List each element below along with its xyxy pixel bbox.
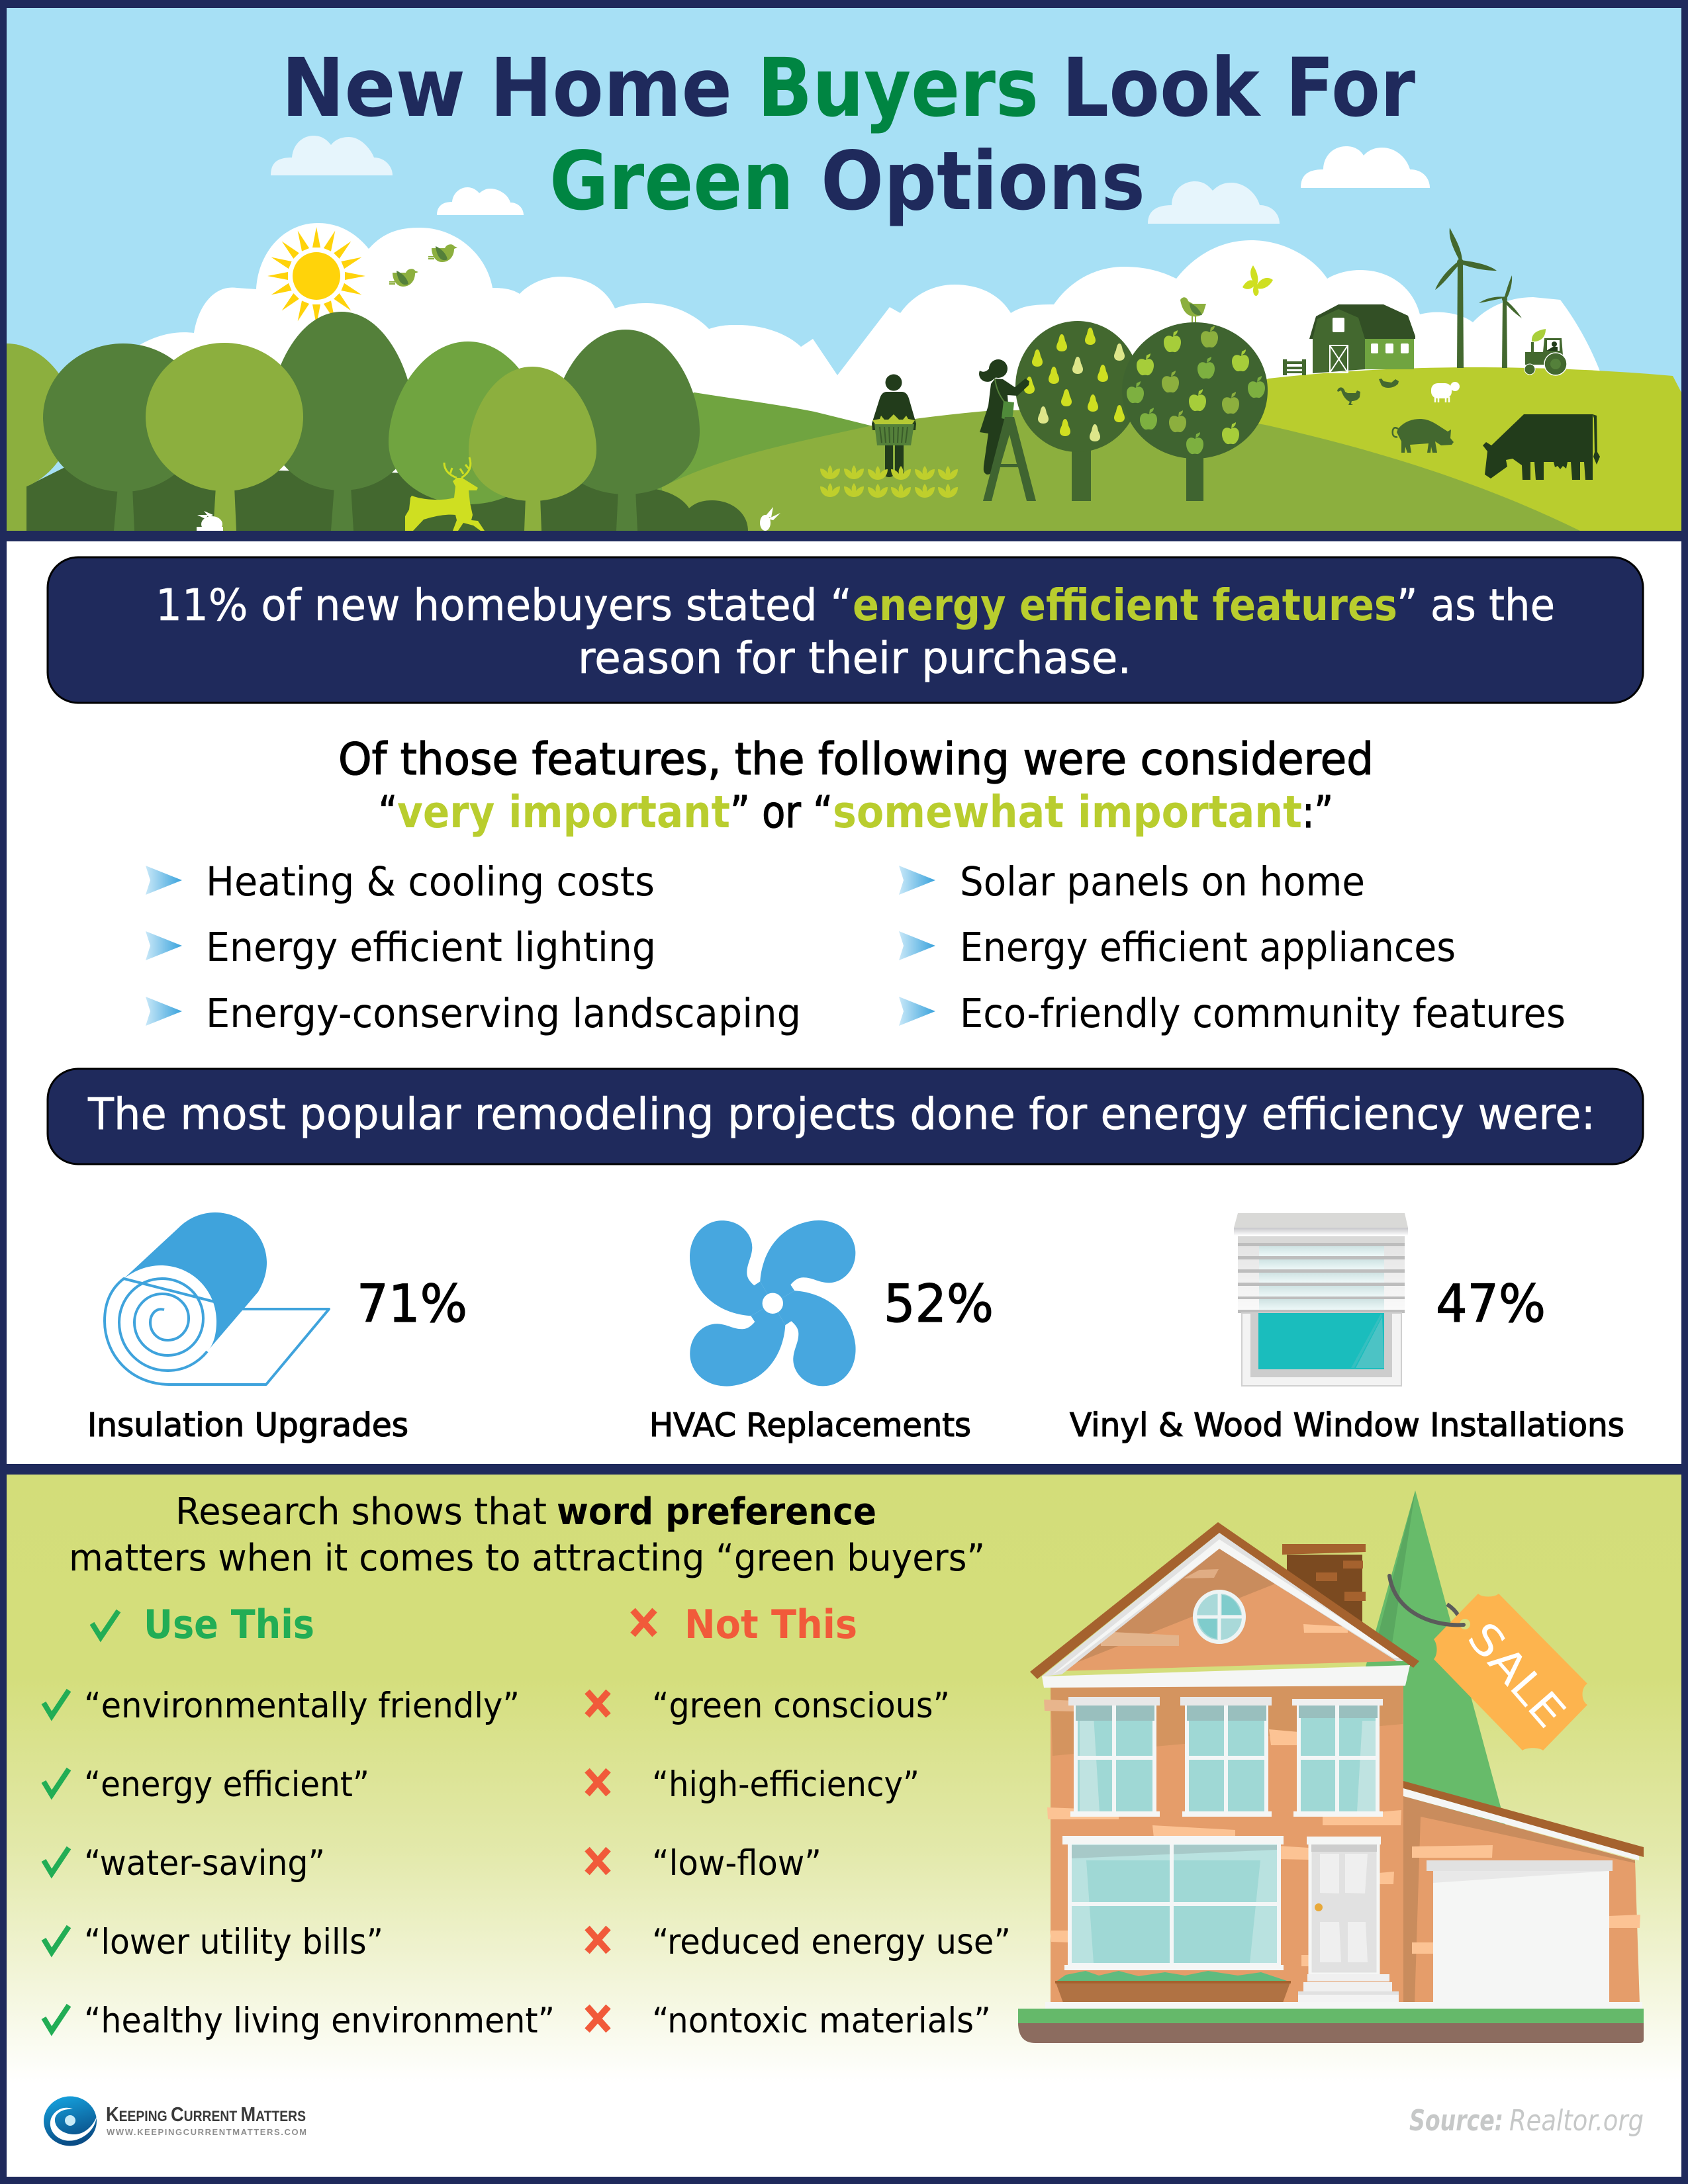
text: research intro: matters when it comes to attracting “green buyers” [69, 1537, 985, 1580]
tree back one [43, 343, 203, 531]
hill lime right [1244, 367, 1681, 531]
logo: keeping current matters: WWW.KEEPINGCURRENTMATTERS.COM [107, 2127, 306, 2137]
callout: 11 percent stat banner: reason for their purchase. [578, 633, 1131, 684]
header: use this: Use This [144, 1602, 314, 1648]
row: low-flow [587, 1843, 821, 1884]
sun [267, 227, 365, 325]
heading: features considered: very important [397, 786, 730, 838]
front door [1307, 1837, 1381, 1974]
source credit [1409, 2104, 1644, 2138]
heading: features considered: “ [379, 786, 397, 838]
chimney [1282, 1544, 1366, 1631]
callout: 11 percent stat banner: 11% of new homebuyers stated “ [156, 580, 852, 631]
bird two [389, 269, 418, 287]
label: hvac replacements: HVAC Replacements [649, 1406, 971, 1444]
label: insulation upgrades: Insulation Upgrades [87, 1406, 408, 1444]
icon: sheep [1431, 382, 1460, 402]
title: Look [1062, 41, 1262, 135]
pear tree [1015, 321, 1140, 501]
cloud right [1301, 146, 1430, 188]
text: research intro: Research shows that [175, 1490, 547, 1533]
upper windows [1068, 1697, 1383, 1817]
logo: keeping current matters [44, 2097, 306, 2146]
title: Options [821, 134, 1145, 228]
round attic window [1195, 1592, 1244, 1642]
sky [7, 8, 1681, 531]
label: window installations: Vinyl & Wood Window Installations [1070, 1406, 1624, 1444]
row: low-flow: “low-flow” [652, 1843, 821, 1884]
sale tag [1389, 1576, 1587, 1751]
wind turbine large [1435, 228, 1497, 368]
garage wing [1403, 1781, 1644, 2004]
icon: hen [1379, 379, 1399, 388]
row: reduced energy use: “reduced energy use” [652, 1922, 1011, 1962]
heading: features considered: somewhat important [833, 786, 1302, 838]
flower box [1055, 1971, 1291, 2003]
list: features right column: Solar panels on home [960, 858, 1365, 905]
wind turbine small [1479, 275, 1522, 368]
tree olive [146, 343, 303, 531]
tractor [1524, 329, 1567, 375]
row: green conscious: “green conscious” [652, 1686, 950, 1726]
source credit: Realtor.org [1509, 2104, 1644, 2138]
title: Green [549, 134, 794, 228]
tree mid green [389, 341, 545, 504]
window centre [1180, 1697, 1272, 1817]
callout: 11 percent stat banner: ” as the [1397, 580, 1555, 631]
list: features left column: Energy efficient lighting [206, 924, 656, 971]
icon: window with blinds [1234, 1213, 1408, 1386]
icon: rabbit left [197, 511, 223, 532]
banner: remodeling projects [48, 1069, 1643, 1164]
source credit: Source: [1409, 2104, 1503, 2138]
title: New [281, 41, 465, 135]
fence [1283, 359, 1306, 375]
callout: 11 percent stat banner [48, 557, 1643, 703]
window left [1068, 1697, 1160, 1817]
list: features left column: Energy-conserving landscaping [206, 990, 801, 1037]
bay window [1062, 1836, 1284, 1970]
heading: features considered: ” or “ [730, 786, 833, 838]
heading: features considered: :” [1302, 786, 1333, 838]
bird one [428, 244, 457, 262]
icon: butterfly [1243, 265, 1273, 296]
panel: word preference background [7, 1475, 1681, 2083]
cloud small [437, 187, 524, 215]
tree olive right [469, 367, 596, 531]
conifer tree [1350, 1490, 1506, 1827]
column: use this [44, 1602, 555, 2041]
list: features left column: Heating & cooling costs [206, 858, 655, 905]
cloud center [1148, 181, 1280, 224]
figure: man with basket [872, 375, 916, 477]
cloud far left [271, 136, 393, 175]
column: not this [587, 1602, 1011, 2041]
bird on tree [1180, 297, 1206, 322]
entablature [1042, 1665, 1410, 1688]
heading: features considered: Of those features, the following were considered [338, 733, 1374, 785]
list: features left column [146, 858, 801, 1037]
window right [1292, 1699, 1383, 1817]
stat: 47 percent: 47% [1436, 1275, 1546, 1334]
icon: rabbit right [760, 507, 780, 531]
list: features right column: Eco-friendly community features [960, 990, 1566, 1037]
foundation [1045, 2002, 1642, 2009]
figure: woman on ladder [979, 359, 1036, 501]
illustration: house for sale [1018, 1490, 1644, 2043]
list: features right column: Energy efficient appliances [960, 924, 1456, 971]
barn [1309, 304, 1415, 373]
text: research intro [69, 1490, 985, 1580]
panel: hero landscape [7, 8, 1681, 532]
stat: 52 percent: 52% [884, 1275, 994, 1334]
text: research intro: word preference [557, 1490, 876, 1533]
title: Home [490, 41, 732, 135]
row: environmentally friendly: “environmentally friendly” [84, 1686, 520, 1726]
grass [1018, 2009, 1644, 2023]
title: For [1286, 41, 1415, 135]
title: Buyers [757, 41, 1039, 135]
list: features right column [899, 858, 1566, 1037]
apple tree [1122, 322, 1268, 501]
row: high-efficiency: “high-efficiency” [652, 1764, 919, 1805]
sale tag: SALE [1458, 1614, 1574, 1737]
row: water-saving: “water-saving” [84, 1843, 325, 1884]
dark bushes [26, 467, 748, 531]
white cloud hills [66, 223, 1609, 529]
logo: keeping current matters: KEEPING CURRENT MATTERS [106, 2103, 306, 2126]
title [281, 41, 1415, 228]
icon: cow [1483, 414, 1600, 480]
header: not this: Not This [684, 1602, 857, 1648]
main facade [1044, 1686, 1403, 2004]
row: energy efficient: “energy efficient” [84, 1764, 369, 1805]
flower bed [820, 465, 958, 498]
door steps [1298, 1974, 1399, 2009]
tree far left [7, 343, 73, 531]
row: healthy living environment: “healthy living environment” [84, 2001, 555, 2041]
hill mid green [596, 392, 884, 531]
icon: hvac fan [690, 1220, 856, 1387]
tree dark right [551, 330, 700, 531]
icon: pig [1393, 419, 1454, 453]
tree tall dark [269, 312, 414, 531]
row: lower utility bills: “lower utility bills” [84, 1922, 383, 1962]
gable [1030, 1522, 1419, 1679]
hill olive [662, 410, 1580, 531]
icon: insulation roll [105, 1212, 329, 1385]
banner: remodeling projects: The most popular remodeling projects done for energy efficiency were: [87, 1089, 1595, 1140]
soil [1018, 2023, 1644, 2043]
stat: 71 percent: 71% [357, 1275, 467, 1334]
icon: rooster [1337, 387, 1360, 405]
row: nontoxic materials: “nontoxic materials” [652, 2001, 991, 2041]
callout: 11 percent stat banner: energy efficient features [853, 580, 1397, 631]
heading: features considered [338, 733, 1374, 838]
icon: deer [405, 457, 485, 531]
